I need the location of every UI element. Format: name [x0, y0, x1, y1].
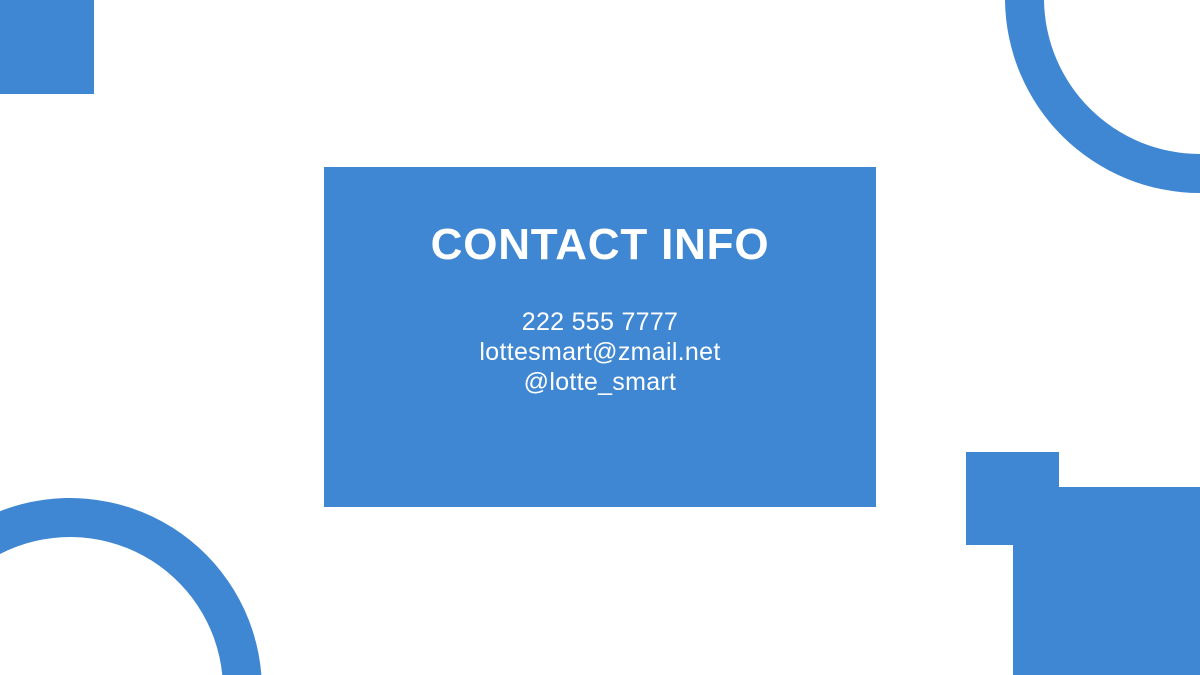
text block: contact details: @lotte_smart	[524, 368, 676, 396]
decorative square: top-left	[0, 0, 94, 94]
panel: contact card	[324, 167, 876, 507]
decorative ring: bottom-left	[0, 498, 261, 675]
text block: contact details	[479, 308, 721, 396]
decorative square: bottom-right small	[966, 452, 1059, 545]
text block: contact details: 222 555 7777	[522, 308, 678, 336]
decorative ring: top-right	[1005, 0, 1200, 193]
heading: contact info: CONTACT INFO	[431, 220, 769, 269]
decorative rectangle: bottom-right large	[1013, 487, 1200, 675]
text block: contact details: lottesmart@zmail.net	[479, 338, 721, 366]
